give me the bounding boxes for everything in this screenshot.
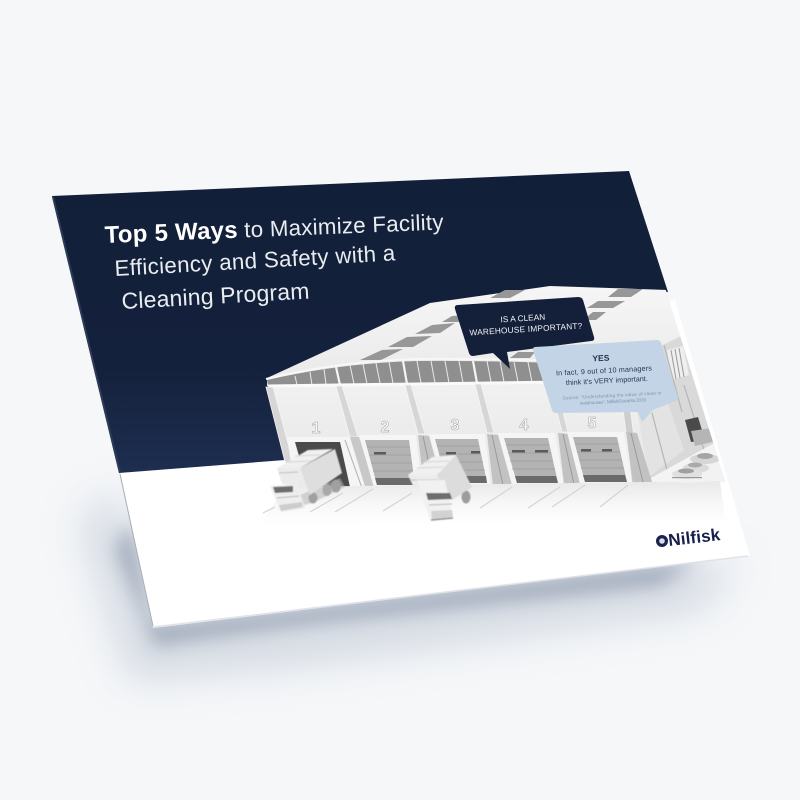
roof skylights [360, 289, 643, 360]
callout: answer [533, 340, 678, 422]
bay numbers: 1 [312, 420, 321, 437]
door 3 [429, 434, 512, 486]
cover bottom edge [153, 556, 748, 627]
brochure cover [52, 171, 750, 628]
wing loading door [685, 417, 702, 442]
title: Top 5 Ways to Maximize Facility [104, 208, 445, 249]
window band [267, 360, 543, 384]
parked cars [672, 453, 719, 483]
wing windows [667, 346, 689, 380]
wall pillars [266, 383, 640, 484]
title [104, 208, 445, 314]
bay numbers: 2 [381, 419, 390, 436]
callout: answer: In fact, 9 out of 10 managers [556, 363, 652, 378]
callout: question [455, 297, 594, 369]
floor markings [263, 485, 628, 513]
door 1 [287, 437, 376, 490]
logo: Nilfisk: Nilfisk [667, 525, 722, 550]
warehouse illustration [260, 286, 740, 525]
callout: question: WAREHOUSE IMPORTANT? [469, 321, 583, 337]
door 5 [567, 432, 652, 484]
callout: answer: warehouses", Nilfisk/Savanta 2019 [580, 397, 646, 406]
dock floor [275, 481, 722, 502]
callout: question: IS A CLEAN [500, 312, 545, 324]
front wall [274, 386, 642, 487]
bay numbers [312, 416, 596, 434]
truck 1 [270, 449, 345, 512]
eave line [266, 358, 536, 380]
wing columns [652, 345, 704, 470]
title: Efficiency and Safety with a [114, 240, 396, 281]
logo emblem [656, 535, 668, 547]
truck 2 [408, 455, 472, 520]
wall top beam [268, 381, 632, 386]
title: Cleaning Program [121, 278, 310, 314]
window mullions [295, 361, 532, 385]
callout: answer: YES [592, 353, 610, 363]
cover navy upper panel [52, 171, 668, 473]
drop shadow under brochure [80, 490, 740, 680]
roof [267, 286, 700, 386]
bay numbers: 3 [451, 417, 460, 434]
callout: answer: think it's VERY important. [566, 374, 648, 387]
door 2 [360, 435, 434, 486]
bay numbers: 5 [588, 415, 597, 432]
right wing building [638, 336, 716, 478]
white panel left edge [120, 474, 153, 626]
bay numbers: 4 [520, 417, 529, 434]
callout: answer: Source: "Understanding the value of clean in [562, 390, 662, 401]
cover left spine [53, 197, 120, 473]
door 4 [498, 433, 583, 485]
cover white lower panel [119, 300, 750, 628]
